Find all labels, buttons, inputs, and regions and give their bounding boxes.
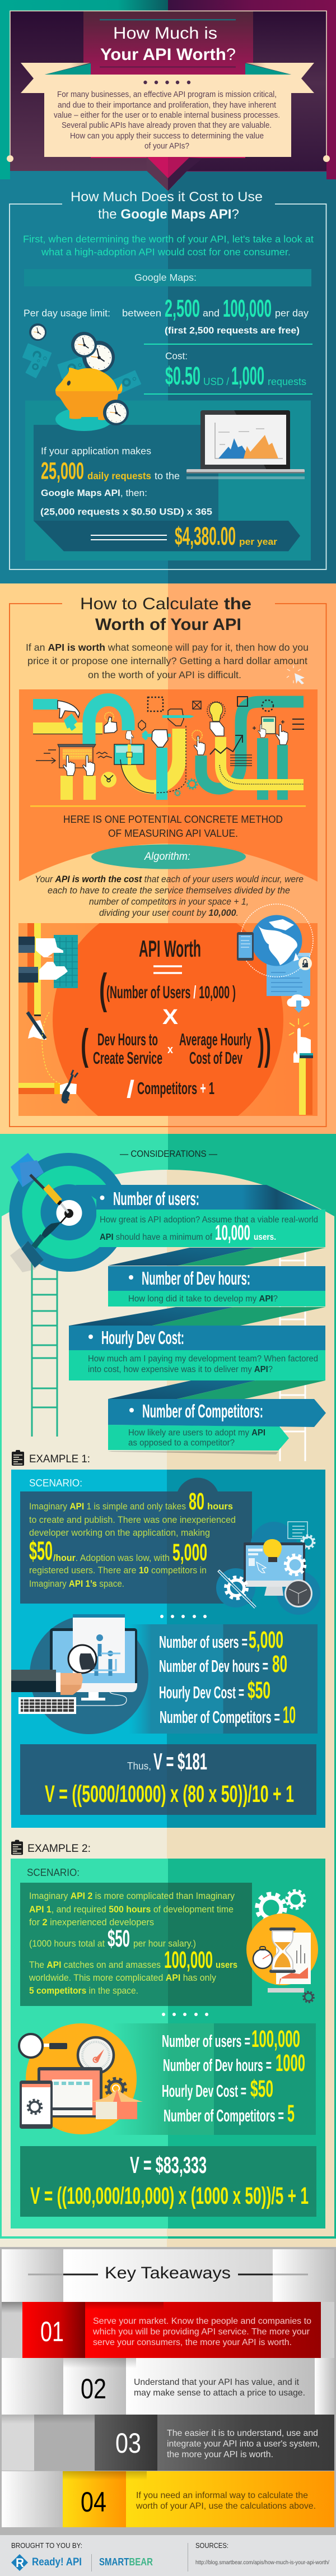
takeaway 01: which you will be providing API service. The more your: [92, 2327, 310, 2337]
formula text: x: [167, 1044, 173, 1056]
icon: hand with wrench: [60, 1070, 78, 1104]
scenario text: [29, 1488, 236, 1589]
sources: [195, 2542, 329, 2566]
calculation text: [40, 445, 212, 517]
algorithm text: [35, 874, 304, 918]
heading: Google Maps section: the Google Maps API?: [98, 207, 239, 222]
algorithm pill: Algorithm:: [144, 851, 190, 863]
icon: pointing hand and growth arrow: [192, 730, 252, 766]
icon: pointing hand: [289, 1018, 313, 1115]
cost row: [165, 350, 306, 390]
section frame: [10, 204, 326, 569]
divider line: [30, 805, 306, 807]
algorithm pill: [91, 844, 246, 869]
icon: target: [9, 1153, 128, 1272]
data values: 5,000: [249, 1627, 283, 1653]
cost row: $0.50: [165, 362, 200, 390]
takeaway 02: may make sense to attach a price to usage.: [134, 2388, 305, 2398]
equals sign: [153, 966, 182, 973]
icon: gears and timer: [101, 772, 197, 796]
formula text: Competitors + 1: [137, 1078, 214, 1098]
icon: globe with phone: [237, 904, 313, 977]
title rule bottom: [100, 66, 236, 67]
heading: calculate worth: How to Calculate the: [80, 595, 251, 613]
intro paragraph: [54, 90, 280, 151]
scenario text: $50: [29, 1536, 53, 1565]
ribbon: competitors: [108, 1399, 326, 1454]
formula text: (Number of Users / 10,000 ): [106, 982, 236, 1002]
logo: SmartBear: SMARTBEAR: [99, 2556, 153, 2568]
panel: footer: BROUGHT TO YOU BY:: [11, 2542, 82, 2550]
panel: magenta title backdrop: [83, 11, 253, 158]
icon: piggy bank: [55, 368, 122, 431]
result card: [20, 2146, 316, 2217]
takeaway 01: [2, 2302, 334, 2358]
ribbon: number of users: users.: [254, 1233, 276, 1242]
data card: [112, 2023, 316, 2135]
panel: intro text card: [44, 75, 291, 157]
data values: 80: [272, 1651, 287, 1678]
illustration: left strips: [18, 923, 60, 1094]
usage limit row: [24, 295, 309, 336]
usage limit row: and: [203, 307, 220, 318]
heading band: [2, 2249, 334, 2302]
intro paragraph: of your APIs?: [144, 142, 189, 151]
icon: typing hands on keyboard: [18, 935, 78, 988]
intro text: First, when determining the worth of your API, let's take a look at: [23, 233, 314, 244]
double rule: [91, 535, 167, 540]
takeaway 03: 03: [115, 2427, 141, 2459]
takeaway 01: serve your consumers, the more your API is worth.: [93, 2338, 292, 2347]
icon: cursor: [287, 665, 305, 684]
heading band: Key Takeaways: [105, 2264, 231, 2282]
takeaway 03: [2, 2415, 334, 2471]
algorithm text: each to have to create the service themselves divided by the: [48, 886, 290, 896]
result card: V = $181: [153, 1748, 207, 1775]
dots: [160, 1615, 207, 1618]
scenario text: to create and publish. There was one inexperienced: [29, 1515, 236, 1525]
scenario text: worldwide. This more complicated API has only: [29, 1973, 217, 1983]
calculation text: (25,000 requests x $0.50 USD) x 365: [40, 507, 212, 517]
calculation text: daily requests: [87, 470, 151, 481]
panel: example 2: SCENARIO:: [27, 1867, 80, 1878]
fold shapes: [69, 1248, 325, 1399]
algorithm text: number of competitors in your space + 1,: [89, 897, 249, 907]
calculation text: If your application makes: [41, 445, 151, 456]
result: $4,380.00: [175, 522, 236, 550]
sources: SOURCES:: [195, 2542, 228, 2550]
cost row: requests: [268, 376, 306, 387]
ribbon: hourly cost: [69, 1326, 325, 1380]
panel: footer: [0, 2535, 336, 2576]
frame with end dots: [7, 11, 330, 162]
panel: how to calculate: [0, 583, 336, 1141]
icon: hand with pen: [27, 1012, 62, 1085]
icon: arrow and dashes: [36, 750, 56, 763]
calculation text: Google Maps API, then:: [41, 488, 147, 498]
takeaway 01: Serve your market. Know the people and companies to: [93, 2316, 311, 2326]
scenario text: API 1, and required 500 hours of development time: [29, 1905, 234, 1915]
scenario text: developer working on the application, making: [29, 1528, 210, 1538]
band: Google Maps label: [24, 269, 311, 286]
data values: [162, 2026, 305, 2127]
data values: 1000: [276, 2050, 305, 2077]
panel: Google Maps cost: [0, 171, 336, 583]
scenario text: (1000 hours total at: [29, 1939, 105, 1949]
data values: [159, 1627, 296, 1729]
scenario text: Imaginary API 1’s space.: [29, 1579, 124, 1589]
calculation text: to the: [155, 470, 180, 481]
method heading: HERE IS ONE POTENTIAL CONCRETE METHOD: [63, 814, 283, 825]
panel: example 1: [11, 1470, 325, 1828]
heading: calculate worth: Worth of Your API: [95, 615, 241, 634]
decorative title rule top: [100, 19, 236, 20]
panel: example 1: SCENARIO:: [29, 1477, 82, 1489]
icon: clocks behind pig: [29, 323, 115, 373]
method heading: [63, 814, 283, 839]
panel: considerations: [0, 1134, 336, 2247]
scenario text: Imaginary API 2 is more complicated than Imaginary: [29, 1891, 235, 1901]
heading: main title: How Much is: [113, 24, 217, 43]
ribbon: number of users: How great is API adoption? Assume that a viable real-world: [100, 1215, 318, 1225]
usage limit row: 2,500: [165, 295, 200, 322]
icon: monitor with bulb, gears and clock: [216, 1522, 320, 1615]
icon: light bulb: [207, 702, 225, 736]
logo: Ready! API: [11, 2554, 82, 2571]
icon: clock front: [103, 400, 129, 425]
logo: Ready! API: Ready! API: [32, 2556, 82, 2568]
ladder left: [32, 1261, 57, 1437]
ribbon: number of users: [76, 1185, 325, 1247]
cream arch background: [2, 1170, 334, 2236]
usage limit row: per day: [275, 307, 309, 318]
paragraph: If an API is worth what someone will pay for it, then how do you: [26, 642, 309, 653]
icon: small line shapes: [96, 697, 273, 793]
scenario text: hours: [207, 1502, 233, 1512]
ribbon: dev hours: [108, 1266, 325, 1306]
ribbon: number of users: 10,000: [215, 1221, 250, 1245]
cost row: USD /: [203, 376, 229, 387]
takeaway 03: integrate your API into a user's system,: [167, 2439, 320, 2449]
icon: calculator and hands: [253, 717, 304, 745]
formula text: Create Service: [93, 1048, 162, 1068]
arrow below intro panel: [147, 157, 203, 191]
scenario card: [20, 1477, 252, 1604]
icon: laptop keyboard with hands: [58, 744, 96, 776]
formula text: Cost of Dev: [189, 1048, 242, 1068]
scenario card: [20, 1883, 252, 2006]
ribbon: number of users: API should have a minimum of: [100, 1233, 213, 1242]
ribbon ends: [21, 63, 314, 93]
data values: 5: [287, 2100, 295, 2127]
band: Google Maps label: Google Maps:: [134, 272, 197, 283]
takeaway 03: The easier it is to understand, use and: [167, 2429, 318, 2438]
scenario text: per hour salary.): [133, 1939, 196, 1949]
dots: [143, 81, 190, 84]
formula text: [81, 935, 271, 1103]
paragraph: price it or propose one internally? Getting a hard dollar amount: [27, 655, 307, 666]
panel: formula: [18, 904, 318, 1116]
illustration: monitor with magnifier: [11, 1614, 148, 1734]
dots: [162, 2013, 208, 2016]
takeaway 01: 01: [40, 2316, 64, 2347]
takeaway 04: worth of your API, use the calculations above.: [136, 2501, 316, 2511]
icon: cloud download: [287, 994, 310, 1013]
result: per year: [239, 536, 277, 547]
icon: briefcase: [114, 731, 144, 765]
intro paragraph: For many businesses, an effective API program is mission critical,: [57, 90, 277, 99]
ribbon: hourly cost: into cost, how expensive was it to deliver my API?: [88, 1365, 273, 1374]
data values: $50: [250, 2075, 273, 2102]
panel: example 2: [11, 1859, 325, 2228]
algorithm text: Your API is worth the cost that each of your users would incur, were: [35, 874, 304, 884]
takeaway 04: [2, 2471, 334, 2527]
takeaway 04: If you need an informal way to calculate the: [136, 2491, 308, 2500]
ribbon: hourly cost: How much am I paying my development team? When factored: [88, 1354, 318, 1364]
takeaway 02: [2, 2358, 334, 2415]
icon: money notes: [22, 343, 142, 395]
paragraph: on the worth of your API is difficult.: [88, 669, 241, 680]
heading: main title: Your API Worth?: [100, 45, 236, 64]
section frame: [10, 604, 326, 1127]
scenario text: for 2 inexperienced developers: [29, 1917, 154, 1928]
usage limit row: 100,000: [223, 295, 272, 322]
logo: Ready! API: R: [16, 2556, 24, 2570]
scenario text: $50: [108, 1925, 130, 1952]
result card: [20, 1744, 316, 1815]
illustration: API tube network: [33, 699, 304, 800]
intro paragraph: value – either for the user or to enable internal business processes.: [54, 111, 280, 120]
formula text: Average Hourly: [179, 1030, 251, 1049]
usage limit row: Per day usage limit:: [24, 307, 110, 318]
scenario text: users: [216, 1960, 237, 1970]
scenario text: registered users. There are 10 competitors in: [29, 1565, 207, 1576]
ribbon: hourly cost: Hourly Dev Cost:: [101, 1327, 184, 1348]
scenario text: 80: [189, 1488, 204, 1515]
formula text: X: [162, 1006, 179, 1029]
scenario text: Imaginary API 1 is simple and only takes: [29, 1502, 186, 1512]
data values: Number of users =: [162, 2031, 250, 2051]
icon: laptop with chart: [186, 410, 305, 479]
heading: calculate worth: [80, 595, 251, 634]
cost row: Cost:: [165, 350, 188, 362]
method heading: OF MEASURING API VALUE.: [108, 828, 238, 839]
ribbon: competitors: as opposed to a competitor?: [128, 1438, 235, 1448]
result card: V = $83,333: [130, 2152, 207, 2178]
heading: Google Maps section: How Much Does it Cost to Use: [71, 189, 263, 205]
panel: hero intro: [0, 0, 336, 191]
formula text: (: [81, 1021, 88, 1068]
ladder right: [280, 1252, 305, 1461]
intro paragraph: and due to their importance and proliferation, they have inherent: [58, 101, 276, 110]
panel: key takeaways: [0, 2247, 336, 2535]
ribbon: competitors: How likely are users to adopt my API: [128, 1428, 265, 1438]
intro text: what a high-adoption API would cost for one consumer.: [41, 247, 291, 258]
heading: Google Maps section: [71, 189, 263, 222]
intro paragraph: How can you apply their success to determining the value: [70, 132, 264, 141]
formula text: Dev Hours to: [97, 1030, 158, 1049]
icon: wrench and fist: [143, 709, 194, 747]
data values: Hourly Dev Cost =: [159, 1683, 244, 1702]
calculation text: 25,000: [41, 457, 84, 484]
heading: example 1: EXAMPLE 1:: [29, 1453, 90, 1465]
data card: [129, 1624, 318, 1734]
panel: formula: )): [258, 1021, 271, 1068]
panel: calculation backdrop: [25, 400, 311, 560]
heading: main title: [100, 24, 236, 64]
arrow band: [34, 521, 300, 552]
scenario text: /hour. Adoption was low, with: [53, 1553, 170, 1563]
data values: 100,000: [251, 2026, 300, 2053]
scenario text: 5,000: [172, 1539, 207, 1566]
intro text: [23, 233, 314, 258]
takeaway 02: Understand that your API has value, and it: [134, 2378, 300, 2387]
heading: example 2: EXAMPLE 2:: [27, 1843, 91, 1855]
icon: hourglass, stopwatch and report: [246, 1891, 318, 2002]
ribbon: number of users: Number of users:: [113, 1188, 199, 1209]
takeaway 04: 04: [81, 2486, 106, 2518]
formula text: /: [127, 1076, 134, 1103]
illustration: devices and gauges: [19, 2023, 143, 2134]
data values: Hourly Dev Cost =: [162, 2081, 246, 2101]
ribbon: dev hours: Number of Dev hours:: [142, 1268, 250, 1289]
paragraph: [26, 642, 309, 680]
heading: example 2: [11, 1840, 91, 1855]
panel: orange illustration card: [19, 689, 318, 882]
takeaway 02: 02: [81, 2373, 106, 2404]
data values: Number of users =: [159, 1632, 248, 1652]
scenario text: 5 competitors in the space.: [29, 1986, 138, 1996]
formula text: (: [99, 965, 107, 1013]
heading: considerations: — CONSIDERATIONS —: [120, 1148, 217, 1159]
icon: hand with puzzle piece: [58, 701, 80, 731]
takeaway 03: the more your API is worth.: [167, 2450, 273, 2459]
scenario text: The API catches on and amasses: [29, 1960, 161, 1970]
usage limit row: between: [122, 307, 161, 318]
heading: example 1: [12, 1450, 90, 1466]
icon: thumbs up: [104, 712, 117, 733]
scenario text: [29, 1891, 237, 1996]
ribbon: dev hours: How long did it take to develop my API?: [128, 1294, 278, 1304]
data values: $50: [248, 1677, 270, 1704]
result card: Thus,: [127, 1760, 151, 1772]
algorithm text: dividing your user count by 10,000.: [99, 908, 239, 918]
panel: example 1: 10: [283, 1702, 296, 1729]
icon: target bullseye and dart: [10, 1153, 82, 1272]
usage limit row: (first 2,500 requests are free): [165, 325, 300, 336]
intro paragraph: Several public APIs have already proven that they are valuable.: [62, 121, 272, 130]
formula text: API Worth: [139, 935, 201, 962]
scenario text: 100,000: [164, 1947, 213, 1973]
icon: browser window with lock: [267, 953, 312, 996]
cost row: 1,000: [231, 362, 264, 390]
